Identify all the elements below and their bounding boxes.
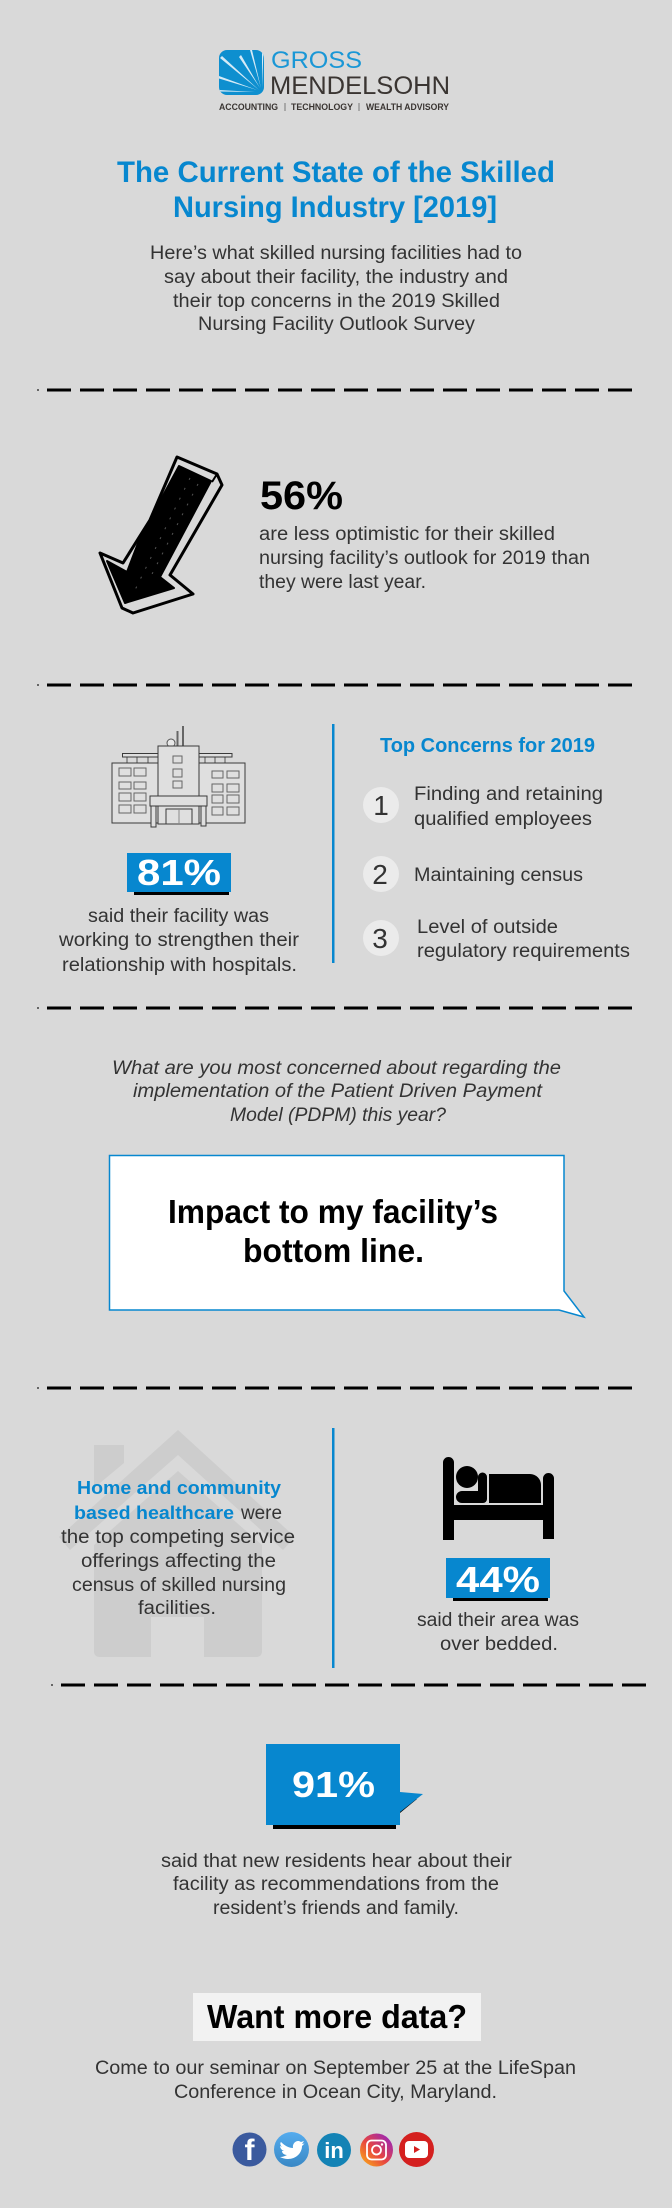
- icon: twitter: [274, 2132, 309, 2167]
- concern 2: Maintaining census: [414, 865, 583, 886]
- text: 56% description: [259, 524, 590, 593]
- text: competing service offerings: based healthcare: [74, 1503, 234, 1523]
- text: 44% description: over bedded.: [440, 1634, 558, 1655]
- text: seminar invitation: Conference in Ocean City, Maryland.: [174, 2082, 497, 2103]
- text: 56% description: nursing facility’s outlook for 2019 than: [259, 548, 590, 569]
- stat: 91% flag badge: [266, 1744, 423, 1829]
- icon: youtube: [399, 2132, 434, 2167]
- concern 2: 2: [372, 859, 388, 890]
- question text: Model (PDPM) this year?: [230, 1105, 446, 1126]
- stat: 81% badge: [127, 852, 231, 895]
- text: 91% description: said that new residents hear about their: [161, 1851, 513, 1872]
- concern 1: [363, 784, 603, 830]
- text: 56% description: they were last year.: [259, 572, 426, 593]
- intro text: [150, 243, 522, 335]
- callout: speech bubble answer: bottom line.: [243, 1232, 424, 1269]
- text: competing service offerings: Home and community: [77, 1478, 281, 1498]
- panel: 56 percent: [100, 457, 590, 613]
- icon: facebook: [232, 2132, 266, 2167]
- concern 3: 3: [372, 923, 388, 954]
- icon: linkedin: [317, 2133, 351, 2167]
- icon: bed: [443, 1457, 554, 1540]
- text: seminar invitation: Come to our seminar on September 25 at the LifeSpan: [95, 2058, 576, 2079]
- intro text: say about their facility, the industry and: [164, 267, 508, 288]
- text: 81% description: said their facility was: [88, 906, 269, 927]
- title: The Current State of the Skilled: [117, 156, 555, 189]
- panel: top concerns for 2019: [363, 735, 630, 962]
- icon: hand-drawn down arrow: [100, 457, 222, 613]
- logo: Gross Mendelsohn: WEALTH ADVISORY: [366, 102, 449, 112]
- concern 1: qualified employees: [414, 809, 592, 830]
- panel: 44 percent over bedded: [417, 1457, 579, 1655]
- text: competing service offerings: were: [240, 1503, 282, 1524]
- text: competing service offerings: the top competing service: [61, 1527, 295, 1548]
- text: 44% description: said their area was: [417, 1610, 579, 1631]
- text: competing service offerings: [61, 1478, 295, 1619]
- concern 3: [363, 917, 630, 962]
- question text: What are you most concerned about regarding the: [112, 1058, 561, 1079]
- text: seminar invitation: [95, 2058, 576, 2103]
- intro text: their top concerns in the 2019 Skilled: [173, 291, 500, 312]
- stat: 56%: 56%: [260, 474, 343, 518]
- panel: 81 percent hospitals: [58, 726, 300, 976]
- heading: top concerns: Top Concerns for 2019: [380, 735, 595, 757]
- icon: linkedin: in: [324, 2138, 344, 2163]
- question text: [112, 1058, 561, 1126]
- text: 91% description: resident’s friends and family.: [213, 1898, 459, 1919]
- logo: Gross Mendelsohn: ACCOUNTING: [219, 102, 278, 112]
- icons: social media row: [232, 2132, 434, 2167]
- text: 56% description: are less optimistic for their skilled: [259, 524, 555, 545]
- stat: 91% flag badge: 91%: [292, 1764, 375, 1805]
- question text: implementation of the Patient Driven Payment: [133, 1081, 543, 1102]
- logo: Gross Mendelsohn: [219, 47, 450, 112]
- text: 81% description: working to strengthen their: [58, 930, 300, 951]
- title: Nursing Industry [2019]: [173, 191, 497, 224]
- text: 44% description: [417, 1610, 579, 1655]
- callout: speech bubble answer: Impact to my facility’s: [168, 1193, 498, 1230]
- icon: hospital building: [112, 726, 245, 827]
- icon: logo sunburst: [219, 50, 264, 95]
- stat: 81% badge: 81%: [137, 852, 221, 893]
- text: 91% description: facility as recommendations from the: [173, 1874, 499, 1895]
- panel: want more data: [95, 1993, 576, 2103]
- logo: Gross Mendelsohn: GROSS: [271, 47, 362, 74]
- icon: instagram: [360, 2134, 393, 2166]
- panel: home and community healthcare: [59, 1430, 295, 1657]
- logo: Gross Mendelsohn: MENDELSOHN: [270, 72, 450, 100]
- stat: 44% badge: [446, 1558, 550, 1601]
- intro text: Nursing Facility Outlook Survey: [198, 314, 476, 335]
- concern 3: regulatory requirements: [417, 941, 630, 962]
- title: [117, 156, 555, 224]
- text: 81% description: relationship with hospitals.: [62, 955, 297, 976]
- concern 3: Level of outside: [417, 917, 558, 938]
- heading: want more data: Want more data?: [207, 1998, 467, 2035]
- concern 2: [363, 856, 583, 892]
- text: competing service offerings: facilities.: [138, 1598, 216, 1619]
- icon: house background: [59, 1430, 295, 1657]
- text: 81% description: [58, 906, 300, 976]
- stat: 44% badge: 44%: [456, 1559, 540, 1600]
- text: competing service offerings: census of skilled nursing: [72, 1575, 286, 1596]
- concern 1: Finding and retaining: [414, 784, 603, 805]
- icon: facebook: f: [244, 2134, 256, 2167]
- text: competing service offerings: offerings affecting the: [81, 1551, 276, 1572]
- callout: speech bubble answer: [110, 1156, 584, 1317]
- logo: Gross Mendelsohn: TECHNOLOGY: [291, 102, 353, 112]
- intro text: Here’s what skilled nursing facilities had to: [150, 243, 522, 264]
- concern 1: 1: [373, 790, 389, 821]
- panel: 91 percent recommendations: [161, 1744, 513, 1919]
- text: 91% description: [161, 1851, 513, 1919]
